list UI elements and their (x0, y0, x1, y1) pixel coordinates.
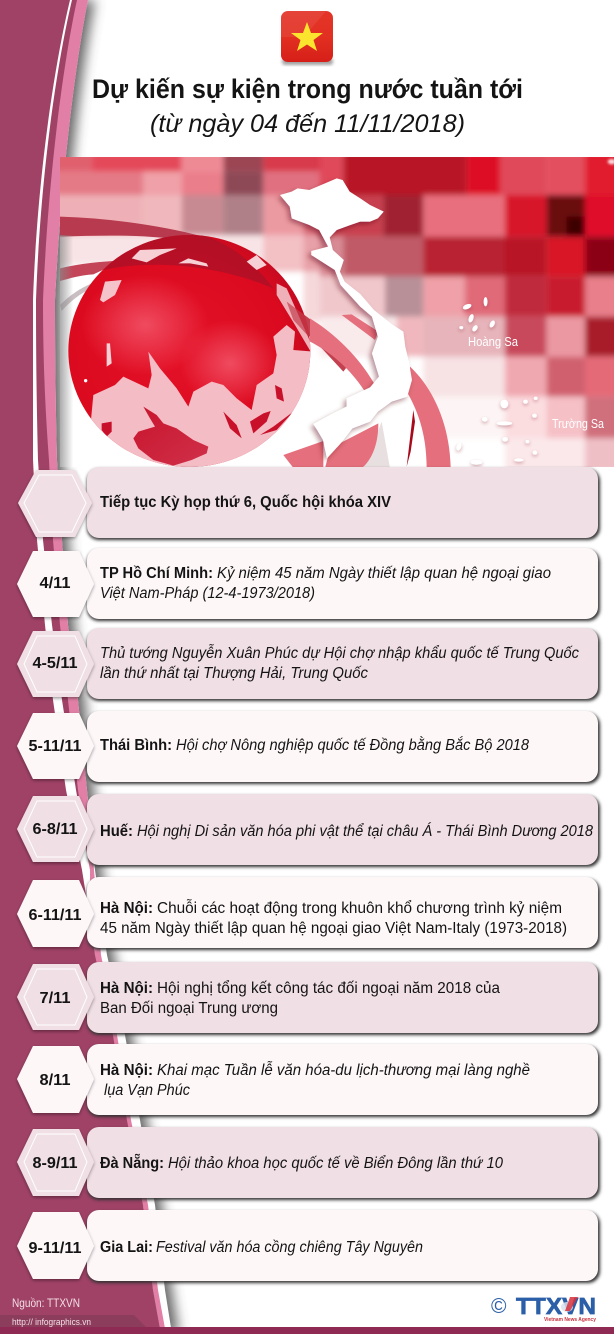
pale ocean area (90, 325, 313, 472)
orbit ribbons: left (60, 217, 353, 470)
banner background mosaic: left half (50, 152, 333, 472)
event 6: 6-11/11 Hanoi, Vietnam-Italy: Chuỗi các hoạt động trong khuôn khổ chương trình kỷ niệm (157, 900, 562, 917)
event 5: 6-8/11 Hue: 6-8/11 (32, 821, 78, 838)
right rim, pale (277, 283, 312, 353)
event 9: 8-9/11 Da Nang: Hội thảo khoa học quốc tế về Biển Đông lần thứ 10 (168, 1155, 503, 1172)
globe (68, 233, 313, 472)
label: Hoàng Sa: Hoàng Sa (468, 335, 518, 349)
event 10: 9-11/11 Gia Lai: Gia Lai: (100, 1239, 153, 1256)
event 7: 7/11 Hanoi, foreign affairs review: Hà Nội: (100, 980, 153, 997)
event 2: 4/11 Ho Chi Minh City (17, 548, 600, 621)
islands: Trường Sa (455, 397, 538, 465)
event 1: ongoing session: Tiếp tục Kỳ họp thứ 6, Quốc hội khóa XIV (100, 494, 392, 511)
event 2: 4/11 Ho Chi Minh City: TP Hồ Chí Minh: (100, 565, 213, 582)
logo: TTXVN: TTXVN (516, 1293, 596, 1319)
event 2: 4/11 Ho Chi Minh City: Việt Nam-Pháp (12-4-1973/2018) (100, 585, 315, 602)
event 2: 4/11 Ho Chi Minh City: 4/11 (40, 575, 71, 592)
logo: TTXVN: Vietnam News Agency (544, 1317, 596, 1323)
event 2: 4/11 Ho Chi Minh City: Kỷ niệm 45 năm Ngày thiết lập quan hệ ngoại giao (217, 565, 551, 582)
event 3: 4-5/11 Prime Minister in Shanghai: lần thứ nhất tại Thượng Hải, Trung Quốc (100, 665, 368, 682)
event 6: 6-11/11 Hanoi, Vietnam-Italy (17, 877, 600, 950)
logo: TTXVN (491, 1293, 596, 1323)
event 5: 6-8/11 Hue: Huế: (100, 823, 133, 840)
event 3: 4-5/11 Prime Minister in Shanghai: 4-5/11 (32, 655, 78, 672)
event 5: 6-8/11 Hue: Hội nghị Di sản văn hóa phi vật thể tại châu Á - Thái Bình Dương 2018 (137, 823, 593, 840)
icon: Vietnam flag (281, 11, 333, 65)
event 9: 8-9/11 Da Nang (17, 1127, 600, 1200)
event 10: 9-11/11 Gia Lai (17, 1210, 600, 1283)
banner: red mosaic, globe and map of Vietnam (50, 152, 614, 472)
title: Dự kiến sự kiện trong nước tuần tới (92, 74, 523, 104)
event 4: 5-11/11 Thai Binh: Hội chợ Nông nghiệp quốc tế Đồng bằng Bắc Bộ 2018 (176, 737, 529, 754)
event 6: 6-11/11 Hanoi, Vietnam-Italy: 6-11/11 (28, 907, 82, 924)
banner background mosaic: right half (320, 152, 614, 472)
logo: TTXVN: © (491, 1295, 507, 1318)
event 8: 8/11 Hanoi, Van Phuc silk village: Hà Nội: (100, 1062, 153, 1079)
map of Vietnam (280, 178, 538, 465)
event 8: 8/11 Hanoi, Van Phuc silk village: 8/11 (40, 1072, 71, 1089)
event 6: 6-11/11 Hanoi, Vietnam-Italy: 45 năm Ngày thiết lập quan hệ ngoại giao Việt Nam-Italy (1973-2018) (100, 920, 567, 937)
event 10: 9-11/11 Gia Lai: Festival văn hóa cồng chiêng Tây Nguyên (156, 1239, 423, 1256)
event 8: 8/11 Hanoi, Van Phuc silk village: Khai mạc Tuần lễ văn hóa-du lịch-thương mại làng nghề (157, 1062, 530, 1079)
event 7: 7/11 Hanoi, foreign affairs review (17, 962, 600, 1035)
footer: url strip and bottom bar (0, 1315, 614, 1334)
northern land highlights (132, 248, 177, 262)
label: Trường Sa: Trường Sa (552, 417, 604, 431)
event 7: 7/11 Hanoi, foreign affairs review: Hội nghị tổng kết công tác đối ngoại năm 2018 của (157, 980, 500, 997)
event 9: 8-9/11 Da Nang: Đà Nẵng: (100, 1155, 164, 1172)
source note: Nguồn: TTXVN (12, 1296, 80, 1310)
islands: Hoàng Sa (459, 297, 496, 332)
event 5: 6-8/11 Hue (17, 794, 600, 867)
sidebar: curved maroon band with white and pink stripes (0, 0, 179, 1334)
event 10: 9-11/11 Gia Lai: 9-11/11 (28, 1240, 82, 1257)
event 8: 8/11 Hanoi, Van Phuc silk village (17, 1044, 600, 1117)
Indonesia and islands (250, 411, 271, 433)
event 3: 4-5/11 Prime Minister in Shanghai: Thủ tướng Nguyễn Xuân Phúc dự Hội chợ nhập khẩu quốc tế Trung Quốc (100, 645, 579, 662)
event 4: 5-11/11 Thai Binh (17, 711, 600, 784)
event 4: 5-11/11 Thai Binh: 5-11/11 (28, 738, 82, 755)
ribbon seen through the globe (286, 302, 310, 337)
event 7: 7/11 Hanoi, foreign affairs review: 7/11 (40, 990, 71, 1007)
event 4: 5-11/11 Thai Binh: Thái Bình: (100, 737, 172, 754)
Australia (133, 407, 208, 466)
event 8: 8/11 Hanoi, Van Phuc silk village: lụa Vạn Phúc (104, 1082, 190, 1099)
orbit ribbons: right (310, 159, 614, 468)
event 6: 6-11/11 Hanoi, Vietnam-Italy: Hà Nội: (100, 900, 153, 917)
event 9: 8-9/11 Da Nang: 8-9/11 (32, 1155, 78, 1172)
dark upper cap (103, 233, 273, 288)
subtitle: date range: (từ ngày 04 đến 11/11/2018) (150, 110, 465, 138)
event 1: ongoing session (18, 467, 600, 540)
footer: url strip and bottom bar: http:// infographics.vn (12, 1317, 91, 1328)
Madagascar (102, 422, 112, 437)
event 3: 4-5/11 Prime Minister in Shanghai (17, 628, 600, 701)
event 7: 7/11 Hanoi, foreign affairs review: Ban Đối ngoại Trung ương (100, 1000, 278, 1017)
